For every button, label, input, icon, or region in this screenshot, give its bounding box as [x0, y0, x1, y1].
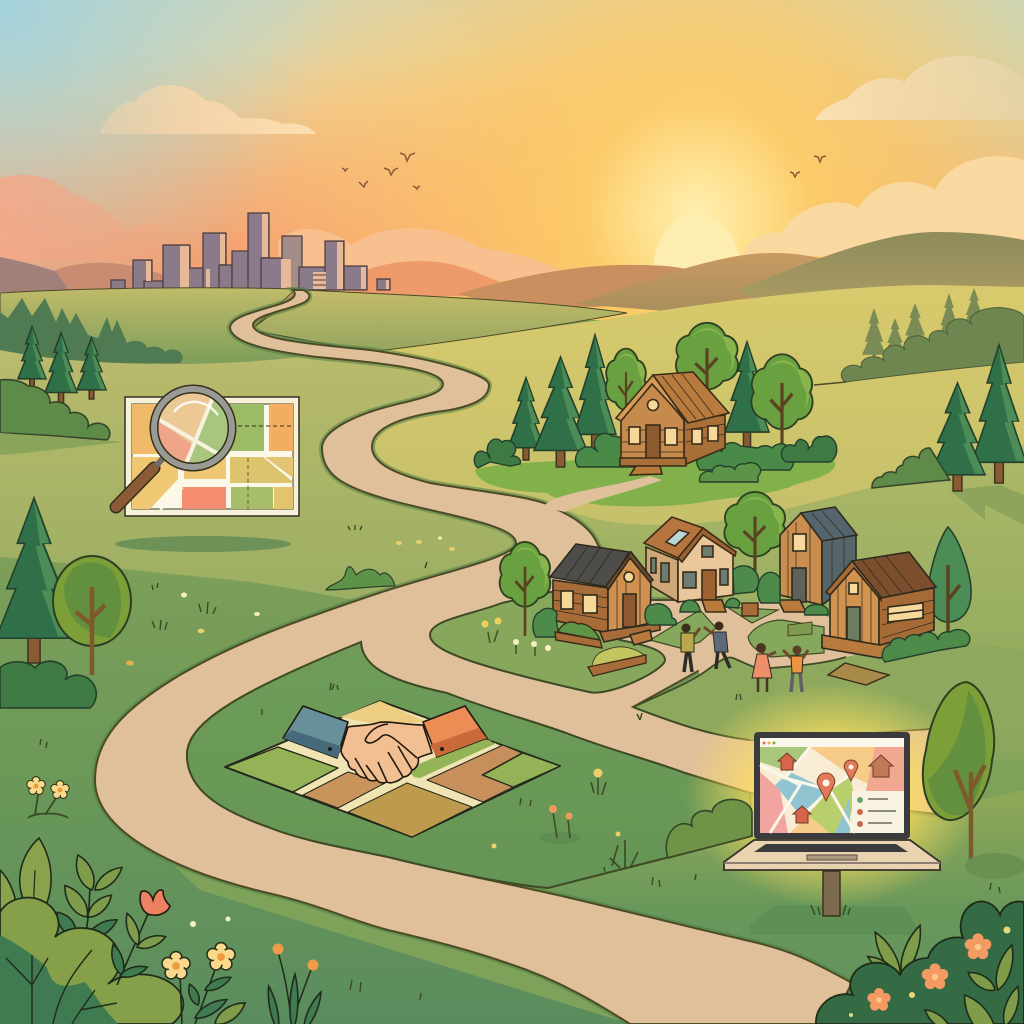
far treeline left [0, 298, 183, 364]
village field [566, 445, 1024, 760]
lower field contour [548, 838, 745, 888]
person three [752, 643, 776, 692]
big pines right [930, 345, 1024, 491]
big leaves behind bottom-right bush [865, 923, 926, 980]
post grass [811, 905, 850, 915]
city skyline [111, 213, 390, 290]
cone tree [928, 527, 971, 632]
right hedge [841, 308, 1024, 382]
tree right of laptop [923, 682, 994, 860]
right far pines [862, 288, 985, 360]
laptop on post [724, 732, 940, 935]
sun [653, 214, 741, 330]
trees around village [500, 492, 786, 636]
flowers left [27, 777, 69, 818]
winding road [95, 290, 945, 1024]
garden beds [555, 603, 889, 685]
right lawn edge line [633, 657, 846, 740]
plant stem with leaves, bottom left [52, 852, 126, 943]
yellow dots in meadow [126, 536, 455, 666]
bush bottom left [0, 898, 183, 1024]
grass tufts and dots [40, 525, 1000, 1000]
bush behind laptop [666, 799, 752, 858]
lower right meadow [548, 790, 1024, 1024]
map ground shadow [115, 536, 291, 552]
trees and pines behind cabin [508, 323, 813, 467]
round tree left [53, 556, 131, 675]
right lower hedge [872, 448, 950, 488]
tree shadow [965, 853, 1024, 879]
right village lawn [633, 645, 1024, 740]
bush left [0, 380, 110, 440]
big pine left [0, 498, 72, 663]
bush bottom right [816, 902, 1024, 1024]
birds [342, 153, 826, 189]
bushes around cabin [474, 433, 837, 482]
cabin one: wood cabin with shingled roof [616, 372, 729, 475]
upper middle field [250, 290, 627, 352]
handshake [283, 706, 487, 783]
cabin island lawn [475, 454, 835, 506]
lawn flowers [482, 618, 551, 656]
sky background [0, 0, 1024, 320]
house: tall cabin with metal roof [778, 507, 857, 612]
middle left field [0, 350, 530, 800]
lower left darker meadow [0, 557, 630, 1024]
meadow contour left [0, 433, 125, 455]
orange bud plants [265, 944, 325, 1024]
tulip plant [108, 890, 170, 985]
person one [681, 624, 700, 672]
person four [783, 646, 808, 692]
village shrubs [533, 566, 970, 662]
small lawns between houses [650, 607, 824, 657]
distant hills [0, 232, 1024, 312]
right contour line [814, 382, 846, 385]
map with parcels [125, 397, 299, 516]
big leaves behind bottom-left bush [0, 838, 51, 917]
house: cabin with dark roof [550, 544, 660, 645]
left village lawn [430, 590, 665, 693]
handshake land parcels [225, 701, 560, 837]
house: front right cabin [822, 552, 936, 658]
magnifying glass [116, 388, 233, 507]
far right yellow field [0, 285, 1024, 720]
upper left field [0, 288, 330, 364]
laptop glow [684, 683, 980, 907]
path to cabin [543, 476, 662, 512]
tuft bush in meadow [326, 567, 395, 590]
handshake meadow [187, 642, 752, 888]
bush lower left [0, 661, 96, 708]
pines left group [18, 327, 106, 403]
house: beige house with skylight [644, 517, 736, 612]
clouds [0, 56, 1024, 282]
person two [704, 622, 730, 669]
yellow flowers bottom [162, 916, 249, 1024]
field shadow right [950, 485, 1024, 525]
meadow flowers [492, 768, 638, 868]
village plaza paths [690, 600, 880, 680]
